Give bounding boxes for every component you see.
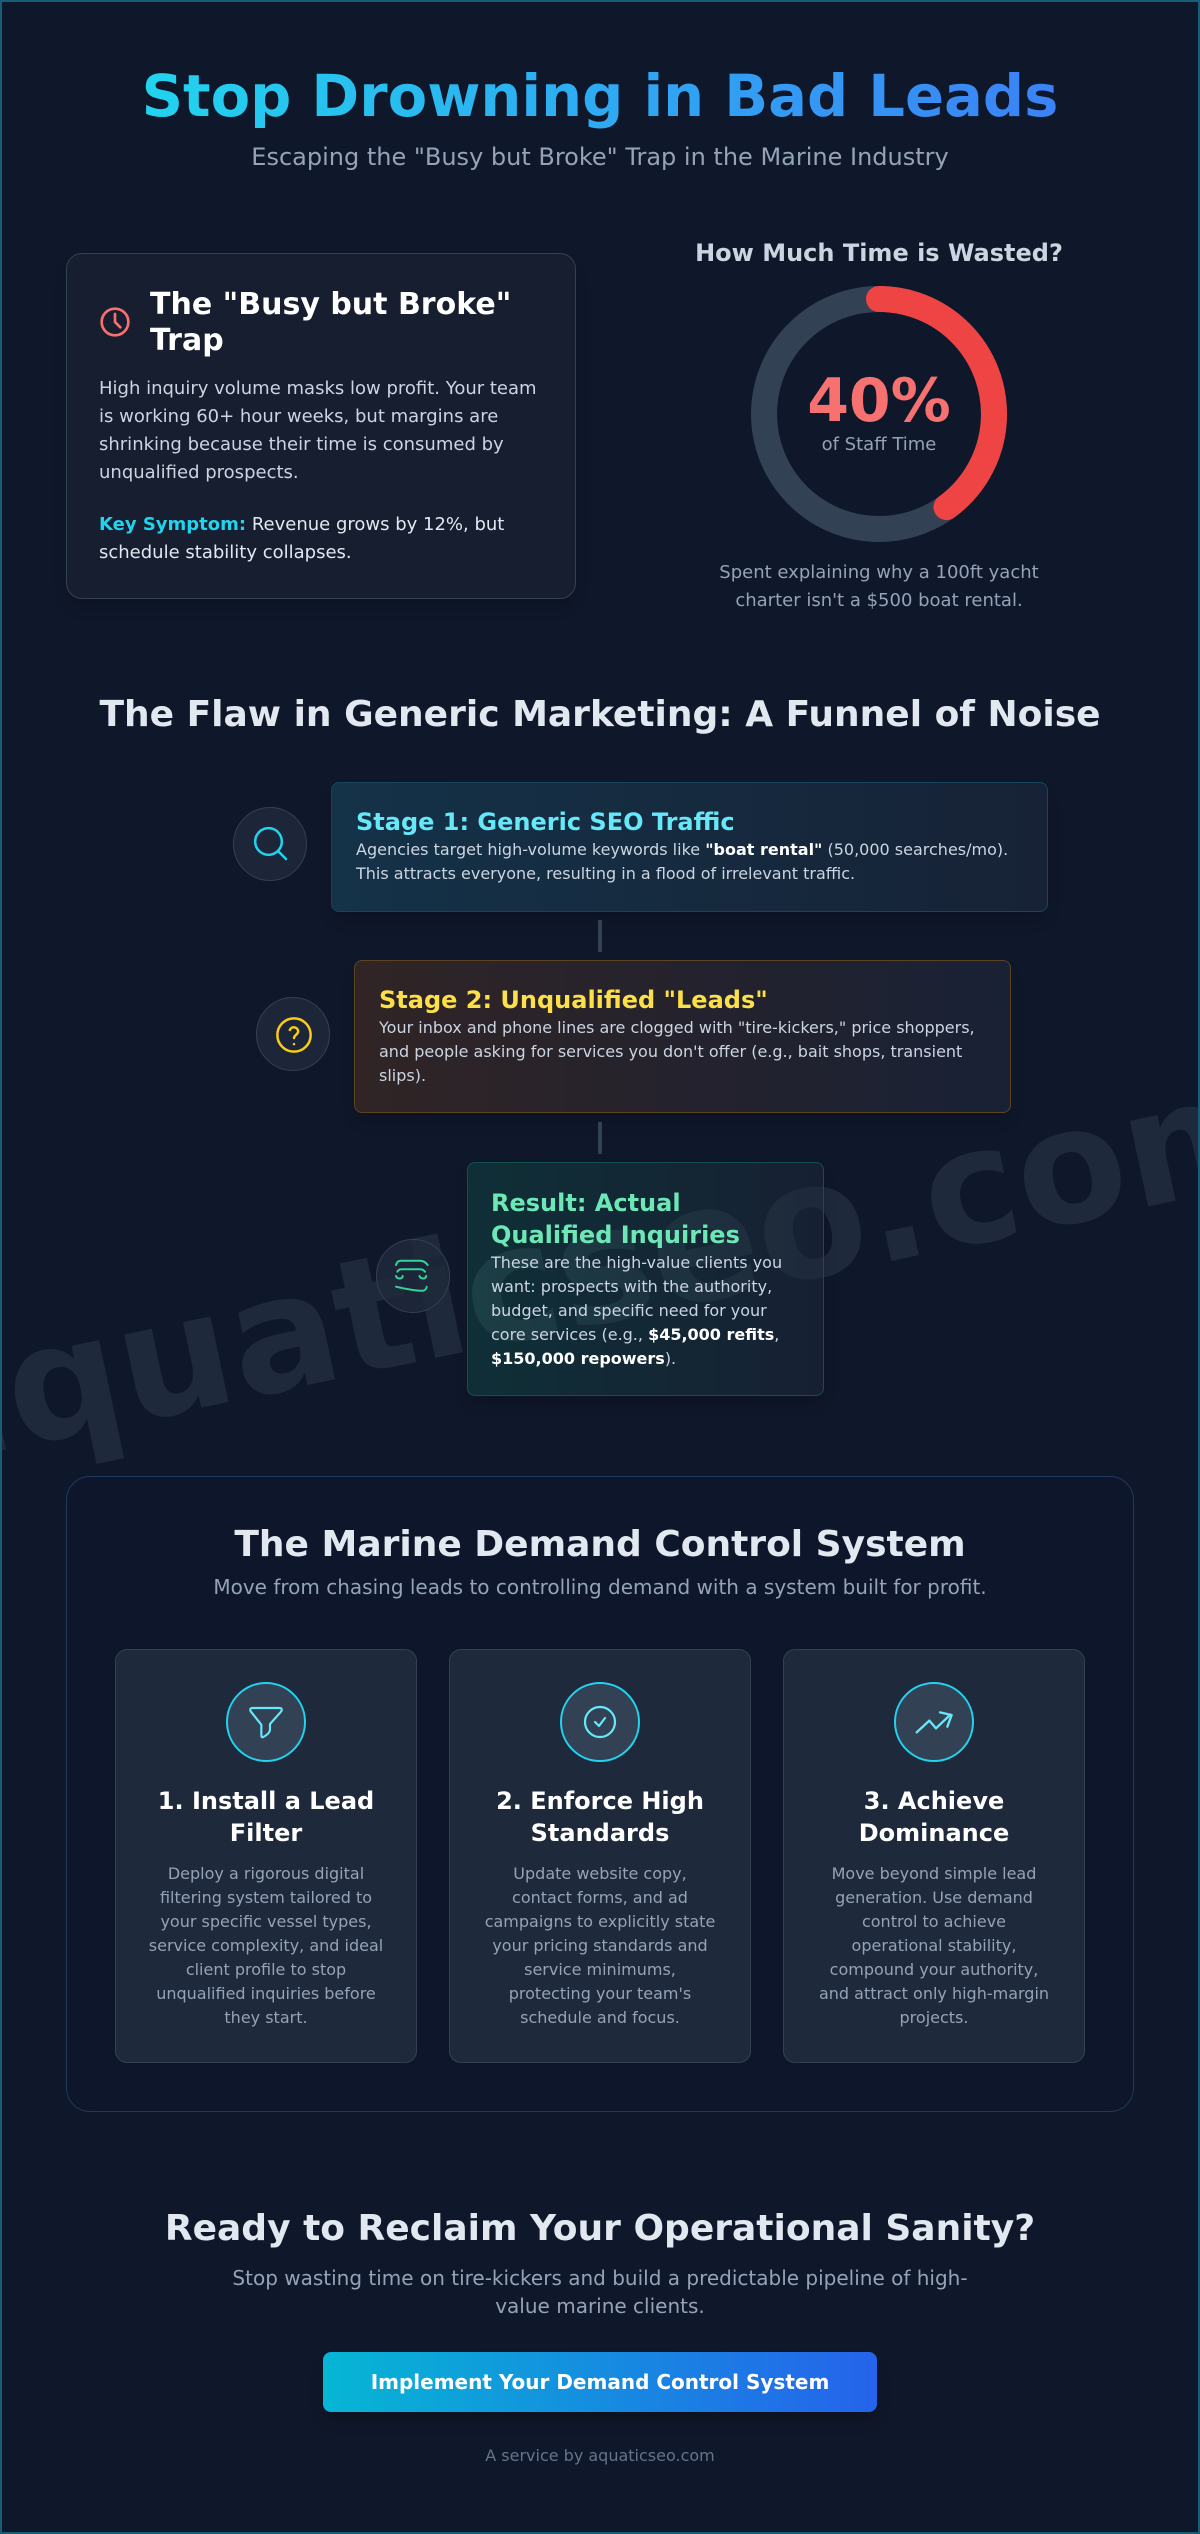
card 1 text: they start.: [224, 2008, 308, 2027]
card 3 heading: Dominance: [859, 1819, 1009, 1847]
card 2 text: your pricing standards and: [492, 1936, 708, 1955]
donut caption: charter isn't a $500 boat rental.: [735, 590, 1023, 611]
card 3 text: compound your authority,: [830, 1960, 1038, 1979]
card 1 text: unqualified inquiries before: [156, 1984, 376, 2003]
card: high standards: [449, 1649, 751, 2063]
donut caption: Spent explaining why a 100ft yacht: [719, 562, 1039, 583]
panel: busy but broke trap: [66, 253, 576, 599]
card 2 text: contact forms, and ad: [512, 1888, 688, 1907]
card 3 text: generation. Use demand: [835, 1888, 1033, 1907]
stat: 40%: 40%: [807, 366, 951, 436]
card 3 text: control to achieve: [862, 1912, 1006, 1931]
card 3 text: projects.: [900, 2008, 968, 2027]
icon: check circle: [560, 1682, 640, 1762]
stage 2 text: Your inbox and phone lines are clogged with "tire-kickers," price shoppers,: [379, 1018, 975, 1037]
result heading: [491, 1189, 740, 1249]
icon: question circle: [256, 997, 330, 1071]
icon: trending up: [894, 1682, 974, 1762]
card 3 text: [819, 1864, 1049, 2027]
funnel stage 2: [354, 960, 1011, 1113]
result text: [490, 1253, 782, 1368]
stage 2 text: [379, 1018, 975, 1085]
stage 1 text: [356, 840, 1008, 883]
stage 2 text: slips).: [379, 1066, 426, 1085]
card: lead filter: [115, 1649, 417, 2063]
panel body text: shrinking because their time is consumed by: [99, 434, 504, 455]
panel body text: [99, 378, 537, 483]
stage 1 text: This attracts everyone, resulting in a flood of irrelevant traffic.: [356, 864, 855, 883]
funnel result: [467, 1162, 824, 1396]
footer: A service by aquaticseo.com: [485, 2446, 715, 2465]
panel heading: [150, 287, 511, 358]
card 2 text: Update website copy,: [513, 1864, 687, 1883]
card 2 text: protecting your team's: [509, 1984, 691, 2003]
cta button: Implement Your Demand Control System: [371, 2370, 829, 2394]
funnel stage 1: [331, 782, 1048, 912]
card 2 text: [485, 1864, 715, 2027]
panel body text: unqualified prospects.: [99, 462, 299, 483]
card 3 text: Move beyond simple lead: [832, 1864, 1036, 1883]
card 1 text: client profile to stop: [186, 1960, 346, 1979]
icon: search circle: [233, 807, 307, 881]
card: achieve dominance: [783, 1649, 1085, 2063]
cta text: value marine clients.: [495, 2294, 705, 2318]
stage 2 heading: Stage 2: Unqualified "Leads": [379, 986, 768, 1014]
subtitle: Escaping the "Busy but Broke" Trap in the Marine Industry: [251, 143, 949, 171]
card 1 text: Deploy a rigorous digital: [168, 1864, 364, 1883]
card 1 text: filtering system tailored to: [160, 1888, 372, 1907]
donut chart: [751, 286, 1007, 542]
donut caption: [719, 562, 1039, 611]
key symptom: [99, 514, 504, 563]
stage 2 text: and people asking for services you don't offer (e.g., bait shops, transient: [379, 1042, 962, 1061]
card 2 heading: 2. Enforce High: [496, 1787, 704, 1815]
result text: core services (e.g., $45,000 refits,: [491, 1325, 779, 1344]
panel body text: High inquiry volume masks low profit. Your team: [99, 378, 537, 399]
key symptom: schedule stability collapses.: [99, 542, 352, 563]
result text: These are the high-value clients you: [491, 1253, 782, 1272]
card 1 heading: Filter: [230, 1819, 302, 1847]
panel: marine demand control system: [66, 1476, 1134, 2112]
card 2 text: schedule and focus.: [520, 2008, 680, 2027]
result text: budget, and specific need for your: [491, 1301, 767, 1320]
icon: funnel: [226, 1682, 306, 1762]
panel heading: Trap: [150, 323, 224, 358]
stat label: of Staff Time: [822, 434, 936, 455]
card 3 heading: 3. Achieve: [864, 1787, 1004, 1815]
stage 1 text: Agencies target high-volume keywords like "boat rental" (50,000 searches/mo).: [356, 840, 1008, 859]
stage 1 heading: Stage 1: Generic SEO Traffic: [356, 808, 735, 836]
result text: $150,000 repowers).: [491, 1349, 676, 1368]
card 3 text: operational stability,: [852, 1936, 1016, 1955]
system subtitle: Move from chasing leads to controlling demand with a system built for profit.: [213, 1575, 987, 1599]
card 1 text: [149, 1864, 383, 2027]
key symptom: Key Symptom: Revenue grows by 12%, but: [99, 514, 504, 535]
card 3 text: and attract only high-margin: [819, 1984, 1049, 2003]
card 3 heading: [859, 1787, 1009, 1847]
card 2 text: service minimums,: [524, 1960, 676, 1979]
card 2 text: campaigns to explicitly state: [485, 1912, 715, 1931]
cta heading: Ready to Reclaim Your Operational Sanity?: [165, 2208, 1035, 2249]
donut heading: How Much Time is Wasted?: [695, 239, 1063, 267]
card 1 heading: [158, 1787, 374, 1847]
card 2 heading: [496, 1787, 704, 1847]
icon: clock: [100, 307, 130, 337]
cta text: [232, 2266, 968, 2318]
panel heading: The "Busy but Broke": [150, 287, 511, 322]
system heading: The Marine Demand Control System: [234, 1524, 966, 1565]
card 1 text: service complexity, and ideal: [149, 1936, 383, 1955]
icon: qualified client circle: [376, 1239, 450, 1313]
card 1 text: your specific vessel types,: [160, 1912, 372, 1931]
result text: want: prospects with the authority,: [491, 1277, 772, 1296]
title: Stop Drowning in Bad Leads: [142, 63, 1058, 130]
card 2 heading: Standards: [531, 1819, 669, 1847]
cta button: [323, 2352, 877, 2412]
result heading: Qualified Inquiries: [491, 1221, 740, 1249]
section heading: funnel: The Flaw in Generic Marketing: A Funnel of Noise: [99, 694, 1101, 735]
cta text: Stop wasting time on tire-kickers and build a predictable pipeline of high-: [232, 2266, 968, 2290]
result heading: Result: Actual: [491, 1189, 681, 1217]
card 1 heading: 1. Install a Lead: [158, 1787, 374, 1815]
panel body text: is working 60+ hour weeks, but margins are: [99, 406, 498, 427]
